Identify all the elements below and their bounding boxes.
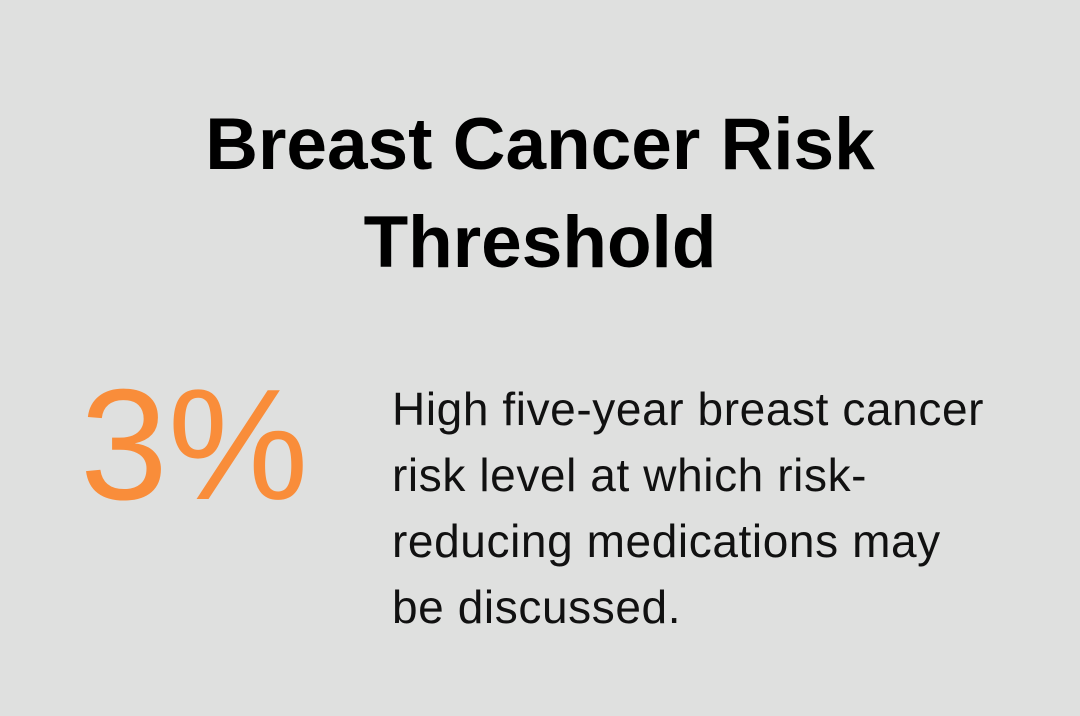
description text [392,383,984,633]
description text: risk level at which risk- [392,449,867,501]
stat: 3%: 3% [80,357,308,533]
description text: High five-year breast cancer [392,383,984,435]
title [205,104,875,283]
description text: be discussed. [392,581,681,633]
title: Breast Cancer Risk [205,104,875,185]
title: Threshold [364,202,716,283]
description text: reducing medications may [392,515,941,567]
